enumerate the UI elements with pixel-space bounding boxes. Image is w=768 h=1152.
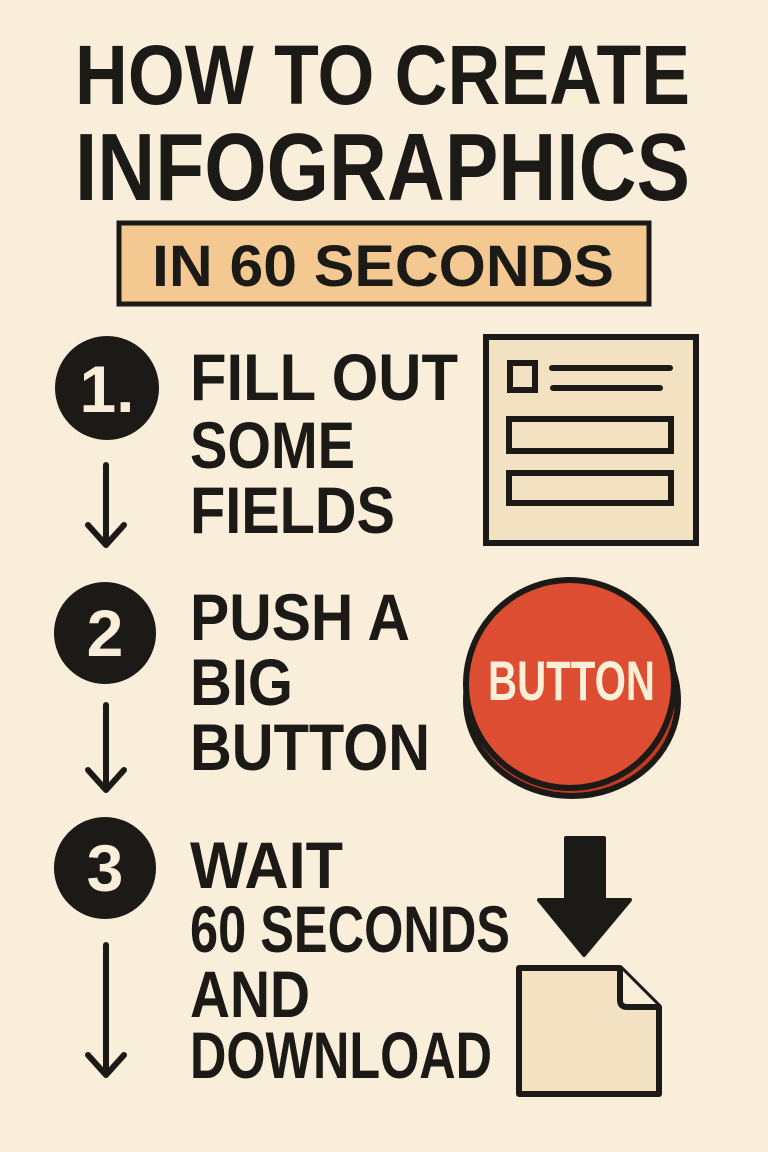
title	[75, 28, 690, 221]
step 3 number	[54, 817, 156, 919]
step 3 number: 3	[87, 831, 123, 905]
icon: big red button	[466, 580, 678, 796]
step 2 text: BIG	[190, 645, 293, 719]
arrow 1	[88, 465, 124, 545]
arrow 2	[88, 705, 124, 790]
step 2 text	[190, 580, 430, 784]
step 1 text: SOME	[190, 408, 355, 482]
step 2 text: PUSH A	[190, 580, 410, 654]
icon: form	[486, 337, 696, 543]
arrow 3	[88, 945, 124, 1075]
step 2 number: 2	[87, 596, 123, 670]
step 3 text: DOWNLOAD	[190, 1018, 492, 1092]
title: HOW TO CREATE	[75, 28, 690, 122]
step 2 text: BUTTON	[190, 710, 430, 784]
icon: big red button: BUTTON	[488, 649, 655, 712]
step 1 text: FIELDS	[190, 473, 395, 547]
subtitle box	[119, 223, 649, 304]
step 2 number	[54, 582, 156, 684]
step 3 text: AND	[190, 957, 310, 1031]
icon: download arrow	[539, 838, 630, 955]
step 1 text	[190, 340, 458, 547]
step 3 text: 60 SECONDS	[190, 892, 510, 966]
step 1 number: 1.	[79, 352, 135, 426]
icon: document	[519, 968, 659, 1094]
step 3 text	[190, 828, 510, 1092]
step 3 text: WAIT	[190, 828, 343, 902]
step 1 number	[55, 336, 159, 440]
subtitle box: IN 60 SECONDS	[152, 234, 614, 299]
step 1 text: FILL OUT	[190, 340, 458, 414]
